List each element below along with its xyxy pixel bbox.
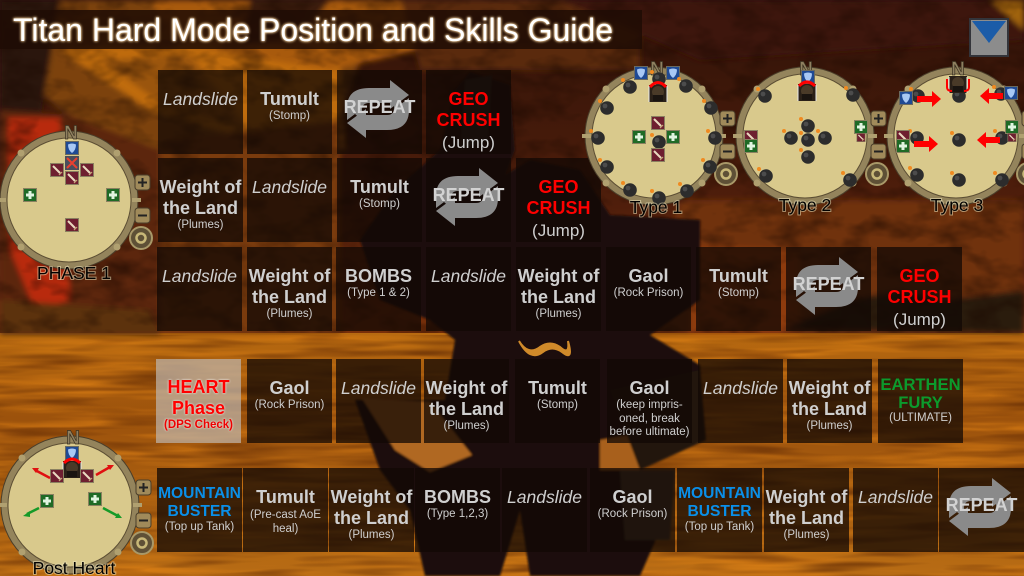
tile: Landslide: Landslide xyxy=(341,378,416,398)
tile: Geo Crush: CRUSH xyxy=(526,198,590,218)
tile: Gaol: Gaol xyxy=(269,378,310,398)
tile: Weight of the Land: Weight of xyxy=(766,487,847,507)
position arrows xyxy=(23,465,122,518)
tile: Weight of the Land xyxy=(247,247,332,331)
tile: repeat: REPEAT xyxy=(344,97,415,117)
tile: Mountain Buster: (Top up Tank) xyxy=(165,521,234,533)
title text: Titan Hard Mode Position and Skills Guide xyxy=(13,12,613,48)
tile: Tumult xyxy=(247,70,332,154)
tile: Tumult: (Stomp) xyxy=(359,198,400,210)
tile: Landslide xyxy=(247,158,332,242)
tile: Mountain Buster xyxy=(157,468,242,552)
tile: Tumult xyxy=(337,158,422,242)
tile: Gaol xyxy=(247,359,332,443)
minimap: Phase 1 xyxy=(0,123,152,283)
tile: Tumult xyxy=(515,359,600,443)
tile: Mountain Buster: MOUNTAIN xyxy=(678,485,761,502)
tile: Weight of the Land xyxy=(764,468,849,552)
tile: Landslide xyxy=(426,247,511,331)
tile: Weight of the Land xyxy=(516,247,601,331)
label: Phase 1: PHASE 1 xyxy=(37,263,111,283)
tile: Gaol keep imprisoned: oned, break xyxy=(619,412,680,424)
tile: Weight of the Land: (Plumes) xyxy=(177,219,224,231)
tile: Tumult: (Stomp) xyxy=(537,399,578,411)
tile: Mountain Buster: (Top up Tank) xyxy=(685,521,754,533)
tile: Heart Phase: HEART xyxy=(168,377,230,397)
red movement arrows xyxy=(914,88,1003,152)
tile: Tumult: Tumult xyxy=(709,266,768,286)
tile: Heart Phase: Phase xyxy=(172,398,225,418)
tile: Weight of the Land: Weight of xyxy=(249,266,330,286)
tile: Landslide: Landslide xyxy=(431,266,506,286)
minimap: Type 3 xyxy=(884,59,1024,215)
tile: Tumult xyxy=(243,468,328,552)
tile: Geo Crush: GEO xyxy=(448,89,488,109)
tile: Bombs xyxy=(415,468,500,552)
minimap: Type 2 xyxy=(733,59,888,215)
tile: Weight of the Land xyxy=(424,359,509,443)
tile: Tumult: (Stomp) xyxy=(718,287,759,299)
tile: Weight of the Land: Weight of xyxy=(426,378,507,398)
tile: Landslide: Landslide xyxy=(162,266,237,286)
tile: Gaol xyxy=(590,468,675,552)
tile: repeat xyxy=(786,247,871,331)
tile: Earthen Fury xyxy=(878,359,963,443)
tile: repeat xyxy=(337,70,422,154)
tile: Weight of the Land: (Plumes) xyxy=(443,420,490,432)
row 4 sequence xyxy=(156,359,963,443)
tile: Geo Crush: (Jump) xyxy=(532,221,585,240)
tile: Geo Crush xyxy=(516,158,601,242)
menu button icon xyxy=(969,18,1009,57)
tile: repeat xyxy=(426,158,511,242)
tile: Tumult: Tumult xyxy=(350,177,409,197)
tile: Gaol keep imprisoned: before ultimate) xyxy=(610,426,689,438)
tile: Geo Crush xyxy=(426,70,511,154)
tile: Tumult: Tumult xyxy=(528,378,587,398)
tile: Geo Crush xyxy=(877,247,962,331)
tile: Weight of the Land: the Land xyxy=(769,508,844,528)
tile: Earthen Fury: (ULTIMATE) xyxy=(889,412,952,424)
tile: Weight of the Land: Weight of xyxy=(331,487,412,507)
tile: Gaol: Gaol xyxy=(612,487,652,507)
tile: Mountain Buster: BUSTER xyxy=(167,503,232,520)
tile: Landslide: Landslide xyxy=(507,487,582,507)
minimap: Type 2: N xyxy=(799,59,813,80)
minimap: Type 1 xyxy=(582,59,737,217)
tile: Weight of the Land: (Plumes) xyxy=(535,308,582,320)
tile: Tumult: (Pre-cast AoE xyxy=(250,509,321,521)
titan silhouette xyxy=(355,72,706,576)
tile: Heart Phase xyxy=(156,359,241,443)
tile: Geo Crush: GEO xyxy=(899,266,940,286)
tile: Tumult: Tumult xyxy=(256,487,315,507)
tile: Landslide xyxy=(157,247,242,331)
minimap: Post Heart: N xyxy=(66,428,80,449)
tile: Weight of the Land xyxy=(787,359,872,443)
tile: Geo Crush: CRUSH xyxy=(436,110,500,130)
tile: Weight of the Land: Weight of xyxy=(789,378,870,398)
tile: Earthen Fury: EARTHEN xyxy=(880,375,961,394)
label: Type 2: Type 2 xyxy=(779,195,831,215)
tile: Earthen Fury: FURY xyxy=(898,393,943,412)
row 5 sequence xyxy=(157,468,1024,552)
tile: Weight of the Land: the Land xyxy=(521,287,596,307)
tile: Gaol: Gaol xyxy=(628,266,668,286)
tile: Weight of the Land: the Land xyxy=(163,198,238,218)
tile: Tumult: (Stomp) xyxy=(269,110,310,122)
tile: Heart Phase: (DPS Check) xyxy=(164,419,233,431)
tile: repeat: REPEAT xyxy=(433,185,504,205)
tile: repeat: REPEAT xyxy=(946,495,1017,515)
tile: Mountain Buster xyxy=(677,468,762,552)
tile: Bombs: (Type 1,2,3) xyxy=(427,508,488,520)
tile: Weight of the Land: Weight of xyxy=(518,266,599,286)
tile: Bombs xyxy=(336,247,421,331)
tile: Bombs: (Type 1 & 2) xyxy=(347,287,410,299)
tile: Weight of the Land: Weight of xyxy=(160,177,241,197)
tile: repeat xyxy=(939,468,1024,552)
tile: Weight of the Land: the Land xyxy=(334,508,409,528)
tile: Weight of the Land: (Plumes) xyxy=(806,420,852,432)
title bar xyxy=(0,10,642,49)
tile: Gaol xyxy=(606,247,691,331)
tile: Bombs: BOMBS xyxy=(345,266,412,286)
tile: Landslide: Landslide xyxy=(858,487,933,507)
tile: Landslide xyxy=(853,468,938,552)
tile: Geo Crush: (Jump) xyxy=(442,133,495,152)
tile: Geo Crush: (Jump) xyxy=(893,310,946,329)
tile: Mountain Buster: BUSTER xyxy=(687,503,752,520)
tile: Landslide xyxy=(502,468,587,552)
row 2 sequence xyxy=(158,158,601,242)
tile: Landslide: Landslide xyxy=(703,378,778,398)
tile: Weight of the Land: (Plumes) xyxy=(348,529,394,541)
tile: Gaol keep imprisoned: Gaol xyxy=(629,378,670,398)
tile: Weight of the Land: the Land xyxy=(792,399,867,419)
minimap: Phase 1: N xyxy=(64,123,78,144)
minimap: Post Heart xyxy=(0,428,153,576)
row 3 sequence xyxy=(157,247,962,331)
tile: Gaol: (Rock Prison) xyxy=(598,508,667,520)
tile: Landslide: Landslide xyxy=(163,89,238,109)
label: Type 1: Type 1 xyxy=(630,197,682,217)
tile: Mountain Buster: MOUNTAIN xyxy=(158,485,241,502)
tile: Geo Crush: GEO xyxy=(538,177,578,197)
tile: Weight of the Land xyxy=(158,158,243,242)
tile: Weight of the Land xyxy=(329,468,414,552)
tile: Gaol: (Rock Prison) xyxy=(614,287,683,299)
tile: Weight of the Land: (Plumes) xyxy=(266,308,312,320)
tile: repeat: REPEAT xyxy=(793,274,864,294)
tile: Gaol: (Rock Prison) xyxy=(255,399,324,411)
tile: Landslide xyxy=(158,70,243,154)
minimap: Type 3: N xyxy=(951,59,965,80)
tile: Tumult xyxy=(696,247,781,331)
label: Type 3: Type 3 xyxy=(931,195,983,215)
tile: Tumult: Tumult xyxy=(260,89,319,109)
tile: Weight of the Land: (Plumes) xyxy=(783,529,830,541)
tile: Geo Crush: CRUSH xyxy=(887,287,952,307)
minimap: Type 1: N xyxy=(650,59,664,80)
tile: Weight of the Land: the Land xyxy=(252,287,327,307)
tile: Bombs: BOMBS xyxy=(424,487,491,507)
tile: Tumult: heal) xyxy=(273,523,298,535)
tile: Landslide: Landslide xyxy=(252,177,327,197)
tile: Gaol keep imprisoned xyxy=(607,359,692,443)
row 1 sequence xyxy=(158,70,511,154)
tile: Landslide xyxy=(336,359,421,443)
tile: Gaol keep imprisoned: (keep impris- xyxy=(616,399,683,411)
tile: Weight of the Land: the Land xyxy=(429,399,504,419)
tile: Landslide xyxy=(698,359,783,443)
